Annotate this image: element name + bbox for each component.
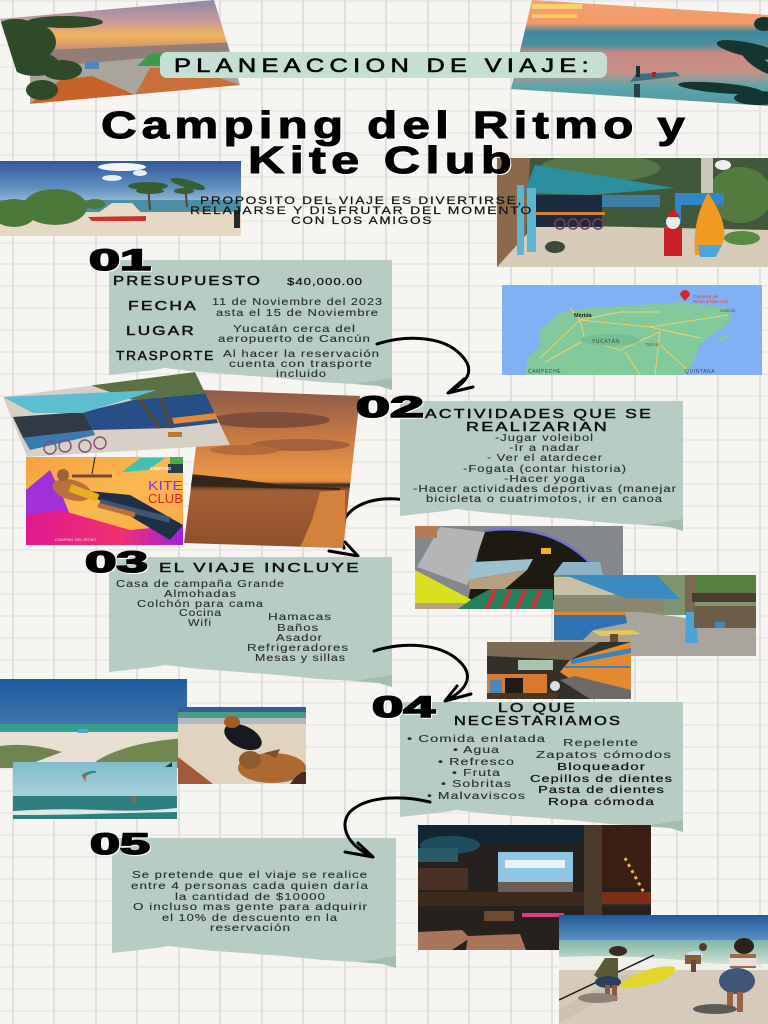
food list [407,733,546,802]
food list: • Malvaviscos [427,790,526,802]
text: proposito del viaje: PROPOSITO DEL VIAJE ES DIVERTIRSE, [200,195,523,207]
supplies list: Cepillos de dientes [530,773,673,785]
photo: blue sky beach [0,679,187,768]
heading: ACTIVIDADES QUE SE [425,407,653,421]
supplies list: Bloqueador [557,761,646,773]
transport: incluido [276,368,327,380]
photo: dogs on the beach [178,707,306,784]
photo: map of Yucatan [502,285,762,375]
supplies list [530,737,673,808]
title: Kite Club [248,140,517,182]
transport [223,348,380,380]
photo: kite club poster: CAMPING DEL RITMO [55,537,96,542]
photo: outdoor patio [554,575,756,656]
number 03: 03 [85,546,148,579]
banner text: PLANEACCION DE VIAJE: [174,56,594,77]
photo: terrace with shade sail and bicycles [3,372,230,457]
photo: map of Yucatan: Ritmo & Kite Club [693,299,729,304]
activity list: bicicleta o cuatrimotos, ir en canoa [426,493,663,505]
activity list: -Hacer actividades deportivas (manejar [413,483,677,495]
activity list [413,432,677,505]
activity list: -Jugar voleibol [495,432,594,444]
number 02: 02 [356,391,424,424]
cost paragraph: reservación [210,922,291,934]
photo: outdoor cinema at night [418,825,651,950]
heading [454,701,622,728]
dates: 11 de Noviembre del 2023 [212,296,383,308]
dates: asta el 15 de Noviembre [216,307,379,319]
number 01: 01 [89,244,151,277]
transport: cuenta con trasporte [229,358,373,370]
photo: camp entrance with shade sail and surfboard [497,154,768,267]
heading: NECESTARIAMOS [454,714,622,728]
photo: sunset over the shore [184,390,360,548]
amount: $40,000.00 [287,276,363,288]
left list: Almohadas [164,588,237,600]
left list: Cocina [179,607,222,619]
photo: kite club poster: CLUB [148,491,183,506]
photo: map of Yucatan: Tizimín [645,342,660,347]
arrow: section 3 to 4 [374,645,471,701]
panel: presupuesto [109,260,392,390]
right list: Baños [277,622,319,634]
photo: map of Yucatan: Camping del [693,294,718,299]
title: Camping del Ritmo y [101,105,690,147]
left list: Casa de campaña Grande [116,578,285,590]
right list: Refrigeradores [247,642,349,654]
text: proposito del viaje: RELAJARSE Y DISFRUTAR DEL MOMENTO [190,205,533,217]
photo: kitchen [487,642,631,699]
photo: beach with red tent and palms [0,161,241,236]
text: proposito del viaje: CON LOS AMIGOS [291,215,433,227]
panel: actividades [400,401,683,531]
supplies list: Ropa cómoda [548,796,655,808]
food list: • Sobritas [441,778,512,790]
heading [425,407,653,434]
activity list: - Ver el atardecer [487,452,603,464]
dates [212,296,383,319]
banner: planeacion de viaje [160,52,607,78]
photo: map of Yucatan: YUCATÁN [592,338,620,345]
place: aeropuerto de Cancún [218,333,371,345]
label: trasporte: TRASPORTE [116,349,215,363]
cost paragraph: O incluso mas gente para adquirir [133,901,368,913]
supplies list: Repelente [563,737,639,749]
photo: kite club poster: CAMPING [150,466,172,471]
photo: sunset camp with tents [0,0,240,106]
heading: EL VIAJE INCLUYE [159,561,361,575]
photo: map of Yucatan: QUINTANA [685,369,715,375]
right list [247,611,349,664]
activity list: -Ir a nadar [509,442,580,454]
photo: kite surfing [13,762,177,819]
label: fecha: FECHA [128,299,198,313]
activity list: -Hacer yoga [504,473,586,485]
food list: • Fruta [452,767,501,779]
heading: LO QUE [498,701,577,715]
photo: kite club poster: KITE [148,478,183,493]
right list: Hamacas [268,611,332,623]
photo: map of Yucatan: CAMPECHE [528,369,561,375]
label: lugar: LUGAR [126,324,196,338]
photo: kite club poster [26,457,183,545]
transport: Al hacer la reservación [223,348,380,360]
photo: paddle board at sunset [511,0,768,106]
photo: map of Yucatan: Cancún [720,308,736,313]
place: Yucatán cerca del [233,323,356,335]
arrow: from section 2 to 3, line under photo [341,499,415,548]
left list: Wifi [188,617,212,629]
title [101,105,690,182]
photo: tent interior [415,526,623,609]
right list: Mesas y sillas [255,652,346,664]
label: presupuesto: PRESUPUESTO [113,274,262,288]
number 05: 05 [90,828,150,861]
right list: Asador [276,632,323,644]
supplies list: Zapatos cómodos [536,749,672,761]
cost paragraph: la cantidad de $10000 [175,891,326,903]
activity list: -Fogata (contar historia) [463,463,627,475]
heading: REALIZARIAN [466,420,609,434]
cost paragraph [131,869,369,934]
cost paragraph: Se pretende que el viaje se realice [132,869,368,881]
panel: el viaje incluye [109,557,392,687]
arrowhead: section 2 to 3 [329,542,358,556]
panel: lo que necesitariamos [400,701,683,832]
panel: costo por persona [112,838,396,968]
left list [116,578,285,629]
left list: Colchón para cama [137,598,264,610]
food list: • Agua [453,744,500,756]
food list: • Comida enlatada [407,733,546,745]
text: proposito del viaje [190,195,533,227]
arrow: section 4 to 5 [345,798,430,857]
food list: • Refresco [438,756,515,768]
place [218,323,371,345]
arrow: section 1 to 2 [377,338,473,393]
cost paragraph: entre 4 personas cada quien daría [131,880,369,892]
supplies list: Pasta de dientes [538,784,665,796]
photo: map of Yucatan: Mérida [574,313,593,319]
cost paragraph: el 10% de descuento en la [162,912,338,924]
photo: kayak on the beach with people [559,915,768,1024]
number 04: 04 [372,691,436,724]
